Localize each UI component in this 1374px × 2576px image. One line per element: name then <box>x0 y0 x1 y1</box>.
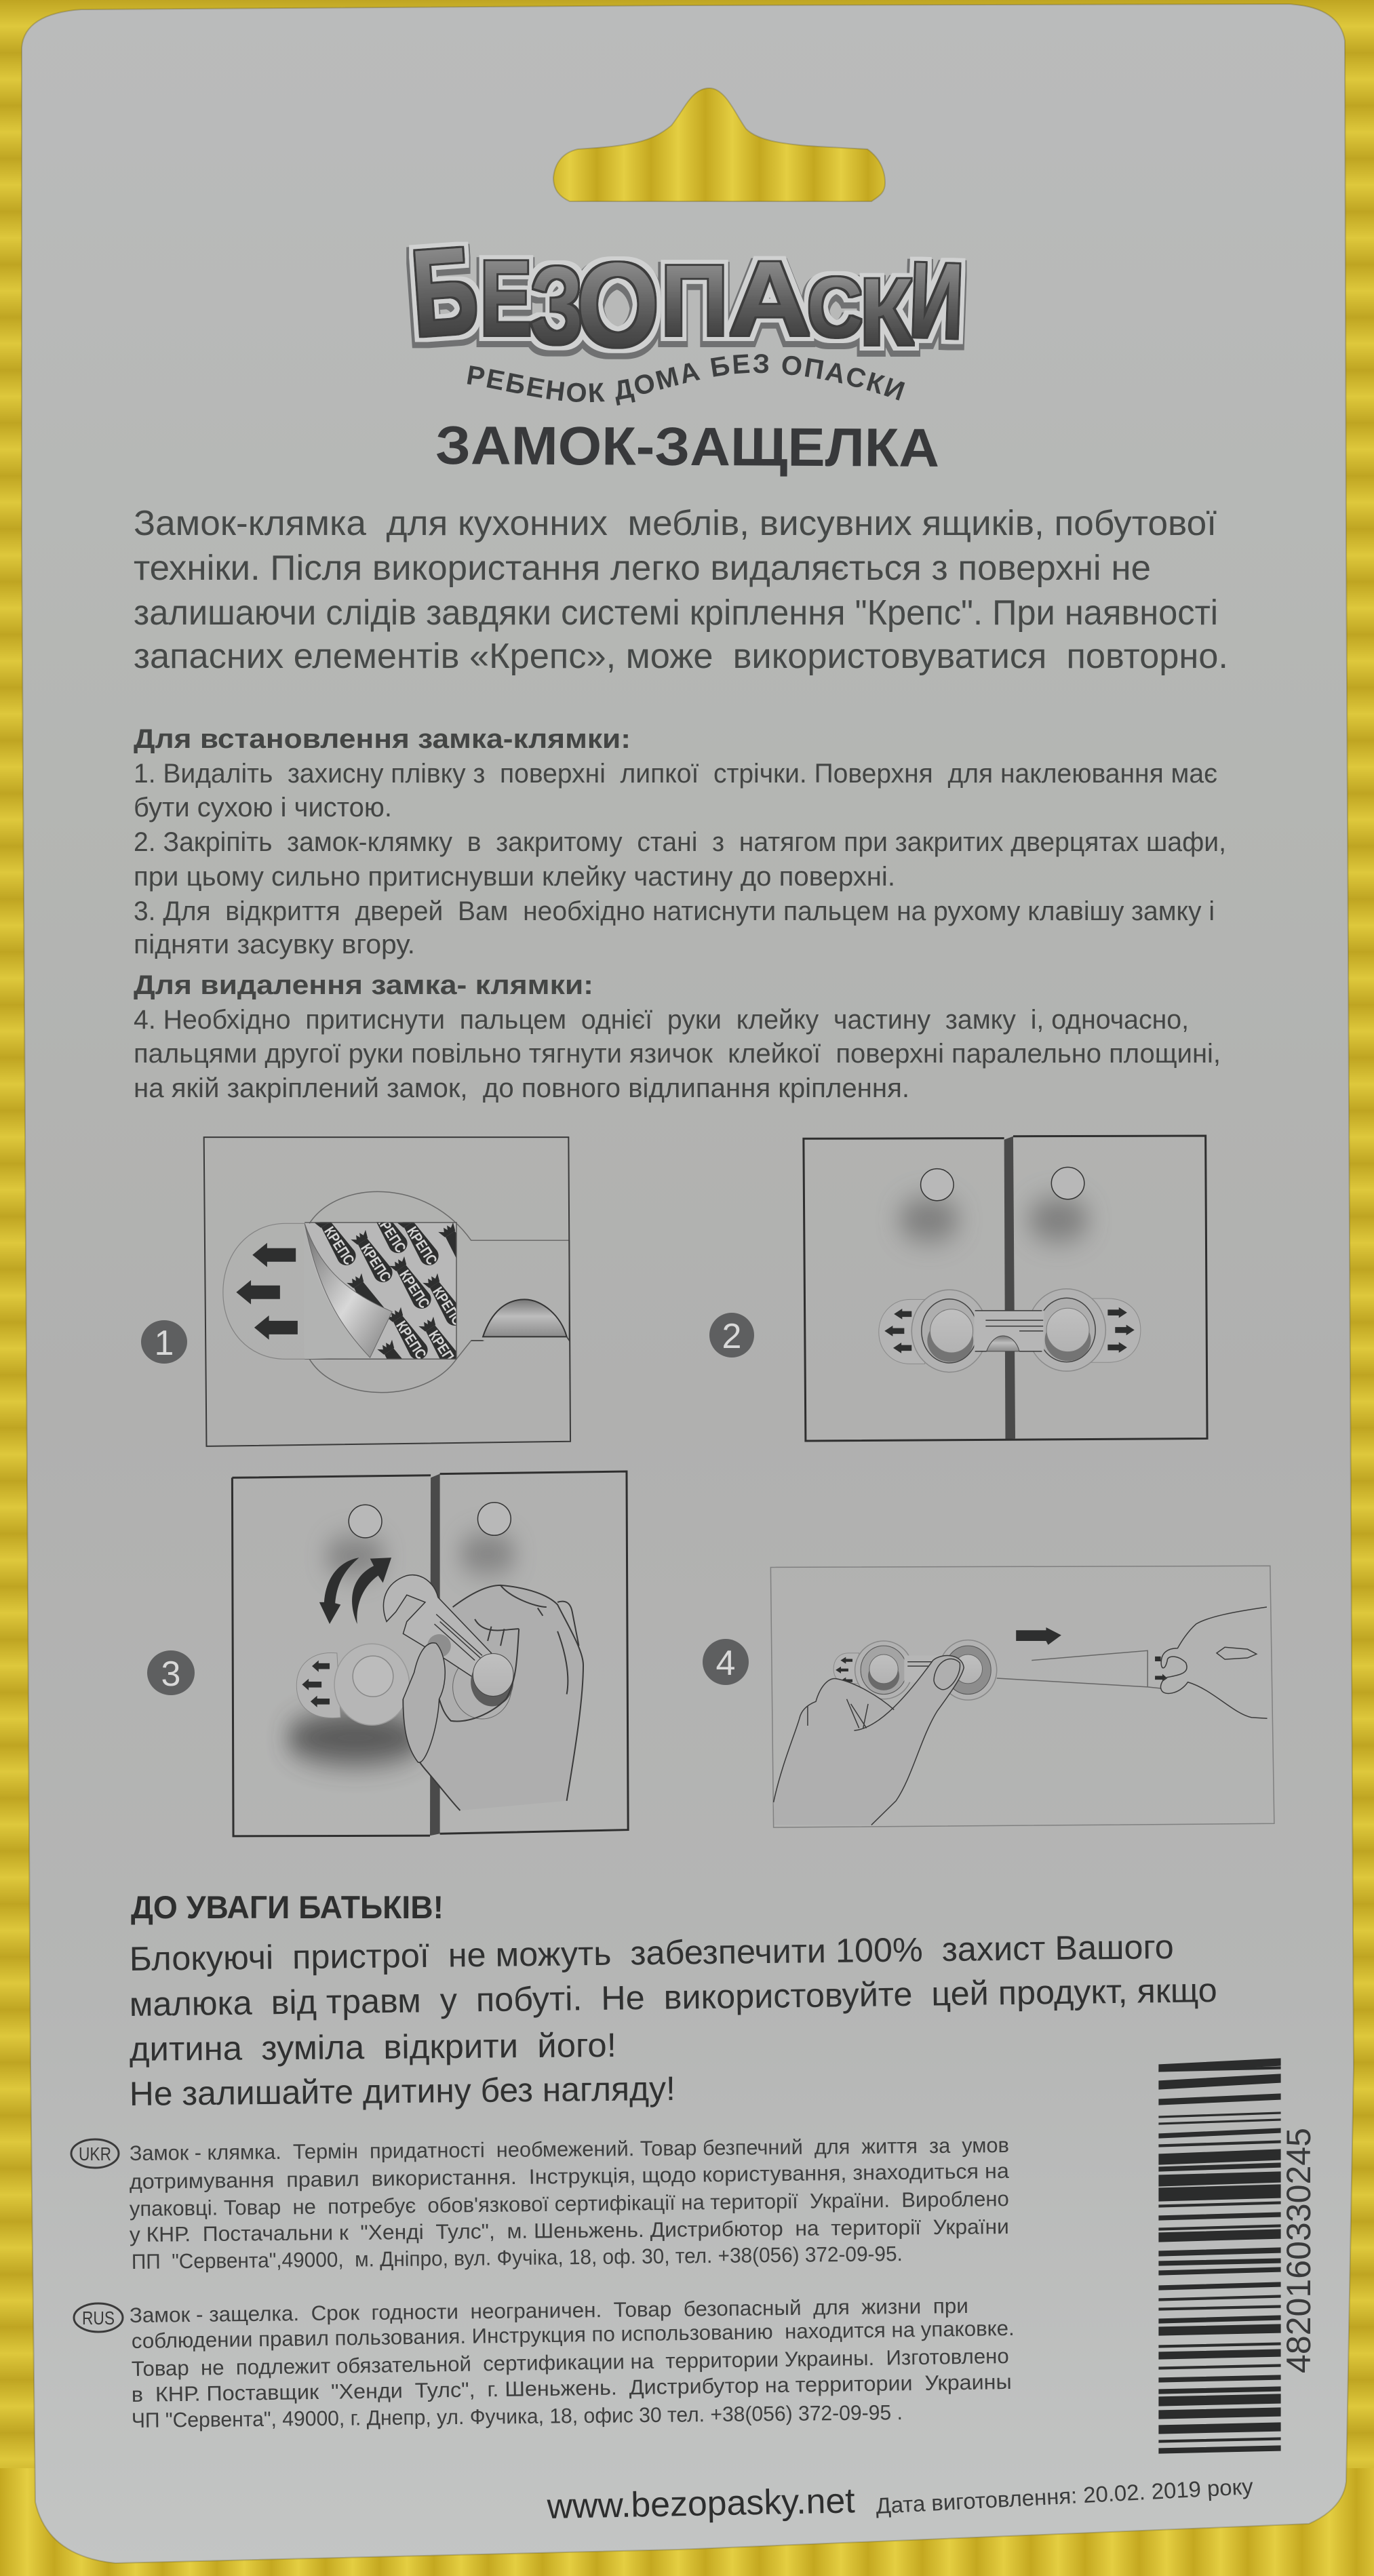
sticker pattern КРЕПС: КРЕПС <box>396 1267 433 1311</box>
barcode digits: 4820160330245 <box>1280 2128 1318 2373</box>
step number 3: 3 <box>161 1654 180 1694</box>
intro paragraph: Замок-клямка для кухонних меблів, висувних ящиків, побутової <box>134 504 1217 543</box>
intro paragraph: техніки. Після використання легко видаляється з поверхні не <box>134 549 1151 588</box>
sticker pattern КРЕПС: КРЕПС <box>425 1327 463 1372</box>
brand logo: О <box>576 239 659 372</box>
step number 1: 1 <box>155 1324 174 1363</box>
badge UKR: UKR <box>79 2143 111 2164</box>
legal text RUS: Товар не подлежит обязательной сертификации на территории Украины. Изготовлено <box>132 2344 1009 2381</box>
step number 2 <box>709 1313 754 1358</box>
sticker pattern КРЕПС: КРЕПС <box>321 1223 358 1268</box>
brand logo: П <box>661 245 728 357</box>
parents warning text: малюка від травм у побуті. Не використовуйте цей продукт, якщо <box>129 1971 1217 2023</box>
instructions: installation: 3. Для відкриття дверей Вам необхідно натиснути пальцем на рухому клавішу замку і <box>134 896 1215 926</box>
brand logo: К <box>860 258 913 365</box>
instructions: installation: підняти засувку вгору. <box>134 930 415 959</box>
legal text UKR: у КНР. Постачальни к "Хенді Тулс", м. Шеньжень. Дистрибютор на території України <box>130 2215 1009 2246</box>
instructions: removal: на якій закріплений замок, до повного відлипання кріплення. <box>134 1073 909 1103</box>
legal text UKR <box>130 2133 1010 2274</box>
parents warning text <box>129 1928 1217 2113</box>
logo tagline: РЕБЕНОК ДОМА БЕЗ ОПАСКИ <box>467 354 905 405</box>
instructions: installation <box>134 724 1226 959</box>
sticker pattern КРЕПС: КРЕПС <box>357 1240 395 1285</box>
step number 2: 2 <box>722 1317 741 1356</box>
brand logo: С <box>807 261 863 355</box>
barcode <box>1159 2059 1280 2453</box>
panel: step 2 latch on cabinet doors <box>804 1136 1207 1441</box>
legal text RUS: Замок - защелка. Срок годности неограничен. Товар безопасный для жизни при <box>130 2294 968 2327</box>
legal text UKR: упаковці. Товар не потребує обов'язкової сертифікації на території України. Вироблено <box>130 2187 1009 2221</box>
intro paragraph: запасних елементів «Крепс», може використовуватися повторно. <box>134 637 1228 676</box>
intro paragraph: залишаючи слідів завдяки системі кріплення "Крепс". При наявності <box>134 593 1218 633</box>
parents warning text: Не залишайте дитину без нагляду! <box>130 2069 675 2113</box>
parents warning heading: ДО УВАГИ БАТЬКІВ! <box>131 1889 444 1925</box>
step number 1 <box>141 1320 187 1364</box>
brand logo: И <box>908 240 965 361</box>
sticker pattern КРЕПС: КРЕПС <box>429 1284 467 1328</box>
badge RUS <box>74 2303 123 2332</box>
brand logo: З <box>530 244 583 367</box>
sticker pattern КРЕПС: КРЕПС <box>404 1223 441 1268</box>
sticker pattern КРЕПС: КРЕПС <box>372 1211 410 1256</box>
step number 3 <box>147 1650 195 1695</box>
brand logo <box>407 220 965 372</box>
brand logo: Е <box>480 239 532 358</box>
instructions: removal: пальцями другої руки повільно тягнути язичок клейкої поверхні паралельно площині, <box>134 1039 1221 1069</box>
sticker pattern КРЕПС <box>311 1222 456 1359</box>
instructions: installation: 2. Закріпіть замок-клямку в закритому стані з натягом при закритих дверцятах шафи, <box>134 827 1226 857</box>
website: www.bezopasky.net <box>546 2481 856 2527</box>
legal text RUS: соблюдении правил пользования. Инструкция по использованию находится на упаковке. <box>132 2316 1015 2353</box>
title: ЗАМОК-ЗАЩЕЛКА <box>435 415 939 478</box>
manufacture date: Дата виготовлення: 20.02. 2019 року <box>875 2474 1254 2518</box>
legal text RUS: ЧП "Сервента", 49000, г. Днепр, ул. Фучика, 18, офис 30 тел. +38(056) 372-09-95 . <box>132 2400 903 2432</box>
instructions: removal <box>134 970 1221 1103</box>
legal text UKR: ПП "Сервента",49000, м. Дніпро, вул. Фучіка, 18, оф. 30, тел. +38(056) 372-09-95. <box>132 2242 903 2274</box>
tab drawing <box>204 1137 570 1446</box>
legal text UKR: дотримування правил використання. Інструкція, щодо користування, знаходиться на <box>130 2159 1010 2194</box>
badge UKR <box>71 2139 119 2168</box>
legal text UKR: Замок - клямка. Термін придатності необмежений. Товар безпечний для життя за умов <box>130 2133 1009 2165</box>
instructions: installation: бути сухою і чистою. <box>134 793 392 823</box>
instructions: installation: при цьому сильно притиснувши клейку частину до поверхні. <box>134 862 895 892</box>
brand logo: Б <box>407 220 482 363</box>
step number 4: 4 <box>716 1644 735 1683</box>
instructions: removal: 4. Необхідно притиснути пальцем однієї руки клейку частину замку і, одночасно, <box>134 1005 1189 1035</box>
parents warning text: Блокуючі пристрої не можуть забезпечити 100% захист Вашого <box>129 1928 1174 1978</box>
panel: step 1 adhesive tab <box>204 1137 570 1446</box>
step number 4 <box>703 1639 749 1685</box>
legal text RUS: в КНР. Поставщик "Хенди Тулс", г. Шеньжень. Дистрибутор на территории Украины <box>132 2370 1012 2406</box>
instructions: installation: 1. Видаліть захисну плівку з поверхні липкої стрічки. Поверхня для наклеювання має <box>134 759 1217 789</box>
badge RUS: RUS <box>82 2307 115 2329</box>
parents warning text: дитина зуміла відкрити його! <box>130 2026 616 2068</box>
legal text RUS <box>130 2294 1015 2432</box>
instructions: installation: Для встановлення замка-клямки: <box>134 724 631 754</box>
panel: step 4 removing the latch <box>770 1566 1274 1827</box>
brand logo: А <box>728 240 811 358</box>
panel: step 3 opening the latch <box>232 1471 628 1836</box>
sticker pattern КРЕПС: КРЕПС <box>393 1317 430 1362</box>
intro paragraph <box>134 504 1228 676</box>
instructions: removal: Для видалення замка- клямки: <box>134 970 593 1000</box>
